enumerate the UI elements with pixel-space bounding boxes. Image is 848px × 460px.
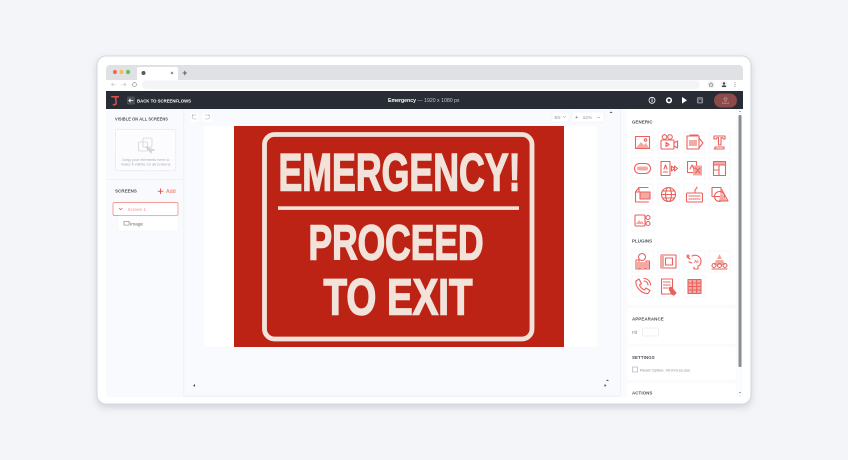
icon: ai head: AI <box>694 259 698 264</box>
icon: dial pad <box>658 276 679 297</box>
icon: image <box>632 132 653 153</box>
icon: layout <box>709 158 730 179</box>
sign headline: EMERGENCY! <box>278 143 520 202</box>
canvas toolbar: − <box>597 115 600 121</box>
card: elements <box>627 109 736 305</box>
icon: text to speech <box>658 158 679 179</box>
icon: data grid <box>684 276 705 297</box>
icon: chip panel <box>658 251 679 272</box>
icon: help <box>649 97 655 103</box>
card: appearance: Fill <box>632 330 637 335</box>
icon: text <box>709 132 730 153</box>
icon: translate <box>684 158 705 179</box>
icon: drag to screen <box>138 138 154 153</box>
card: appearance <box>627 308 736 344</box>
canvas toolbar: EN <box>554 115 560 120</box>
back button: BACK TO SCREENFLOWS <box>137 98 192 104</box>
drop zone: make it visible on all screens <box>121 162 171 166</box>
icon: ai head <box>684 251 705 272</box>
browser tab strip <box>106 65 743 80</box>
icon: map location <box>632 251 653 272</box>
heading: plugins: PLUGINS <box>632 238 652 244</box>
image layer row <box>118 216 178 231</box>
icon: globe <box>658 184 679 205</box>
canvas toolbar: + <box>575 115 578 121</box>
back button <box>127 96 192 104</box>
canvas toolbar: 62% <box>583 115 592 120</box>
add screen button <box>158 188 176 195</box>
icon: phone <box>632 276 653 297</box>
heading: visible on all screens: VISIBLE ON ALL SCREENS <box>115 116 168 122</box>
canvas toolbar <box>190 112 612 122</box>
browser window <box>106 65 743 397</box>
heading: generic: GENERIC <box>632 120 653 124</box>
panel: left sidebar <box>106 109 184 397</box>
icon: file <box>632 184 653 205</box>
canvas scroll arrows <box>193 380 609 387</box>
document title: Emergency — 1920 x 1080 px <box>388 98 460 104</box>
card: actions <box>627 383 736 396</box>
sign line: proceed: PROCEED <box>308 216 484 270</box>
outer device card <box>97 56 751 404</box>
icon: video camera <box>658 132 679 153</box>
sign line: to exit: TO EXIT <box>324 268 472 325</box>
icon: button <box>632 158 653 179</box>
panel: right properties <box>620 109 743 397</box>
image layer row: Image <box>130 222 143 226</box>
top navigation bar <box>106 91 743 109</box>
card: settings: Reset Option, hh:mm:ss.sss <box>640 368 690 373</box>
drop zone <box>115 129 176 171</box>
heading: screens: SCREENS <box>115 188 137 194</box>
icon: team tree <box>709 251 730 272</box>
canvas <box>204 126 597 347</box>
icon: shapes <box>709 184 730 205</box>
icon: gallery <box>632 210 653 231</box>
icon: image slider <box>684 132 705 153</box>
icon: save <box>697 98 703 103</box>
card: appearance: APPEARANCE <box>632 316 664 322</box>
sign border <box>264 134 532 339</box>
icon: settings <box>667 98 671 103</box>
icon: keyboard <box>684 184 705 205</box>
scrollbar <box>738 111 742 393</box>
browser address bar <box>106 80 743 91</box>
icon: logo <box>111 96 119 106</box>
card: actions: ACTIONS <box>632 390 652 396</box>
screen 1 row <box>113 202 178 216</box>
upload button <box>714 94 737 108</box>
add screen button: Add <box>166 189 176 195</box>
emergency sign <box>234 126 564 347</box>
drop zone hint: Drag your elements here to <box>122 157 169 162</box>
icon: play <box>682 97 687 104</box>
card: settings: SETTINGS <box>632 355 655 360</box>
card: settings <box>627 347 736 380</box>
screen 1 row: Screen 1 <box>128 207 146 212</box>
